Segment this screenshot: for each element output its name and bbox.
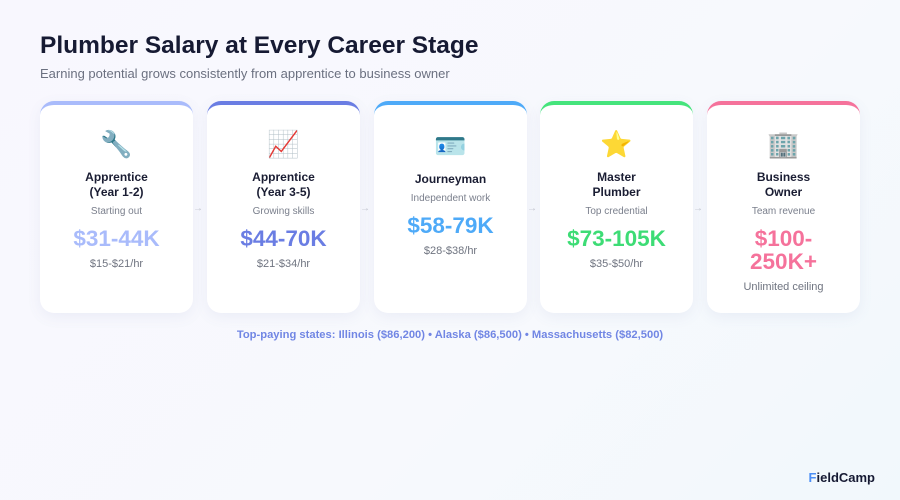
card title: Journeyman	[415, 172, 486, 186]
card: apprentice year 1-2: $31-44K	[73, 226, 160, 251]
card: business owner	[707, 101, 860, 313]
card: apprentice year 1-2: Starting out	[91, 206, 142, 217]
subtitle: Earning potential grows consistently from apprentice to business owner	[40, 66, 450, 81]
card: apprentice year 1-2	[40, 101, 193, 313]
card: apprentice year 3-5: Growing skills	[253, 206, 314, 217]
arrow: →	[527, 203, 537, 214]
card title: Plumber	[592, 185, 640, 199]
footer note: top-paying states: Top-paying states: Illinois ($86,200) • Alaska ($86,500) • Massachusetts ($82,500)	[237, 329, 663, 341]
arrow: →	[693, 203, 703, 214]
card title: Business	[757, 170, 810, 184]
card: business owner: 250K+	[750, 249, 817, 274]
card title: Owner	[765, 185, 802, 199]
card: business owner: Unlimited ceiling	[743, 281, 824, 293]
card title: (Year 1-2)	[89, 185, 144, 199]
card: journeyman: $58-79K	[407, 213, 494, 238]
card: business owner: $100-	[755, 226, 812, 251]
logo: FieldCamp	[809, 470, 875, 485]
card: master plumber: $73-105K	[567, 226, 666, 251]
icon: building: 🏢	[767, 130, 800, 160]
icon: chart: 📈	[267, 130, 300, 160]
card title	[592, 170, 640, 199]
card: journeyman: $28-$38/hr	[424, 245, 477, 257]
card title: Apprentice	[85, 170, 148, 184]
card: business owner: Team revenue	[752, 206, 815, 217]
card: master plumber	[540, 101, 693, 313]
card title: Master	[597, 170, 636, 184]
card: apprentice year 1-2: $15-$21/hr	[90, 258, 143, 270]
card title	[252, 170, 315, 199]
card: master plumber: $35-$50/hr	[590, 258, 643, 270]
card title	[757, 170, 810, 199]
title: Plumber Salary at Every Career Stage	[40, 32, 479, 59]
card: master plumber: Top credential	[585, 206, 648, 217]
card: journeyman: Independent work	[411, 193, 490, 204]
card: apprentice year 3-5: $44-70K	[240, 226, 327, 251]
card title: Apprentice	[252, 170, 315, 184]
arrow: →	[360, 203, 370, 214]
icon: star: ⭐	[600, 130, 633, 160]
arrow: →	[193, 203, 203, 214]
card title	[85, 170, 148, 199]
card: journeyman	[374, 101, 527, 313]
card title: (Year 3-5)	[256, 185, 311, 199]
card: apprentice year 3-5: $21-$34/hr	[257, 258, 310, 270]
icon: wrench: 🔧	[100, 130, 133, 160]
card: apprentice year 3-5	[207, 101, 360, 313]
icon: id card: 🪪	[434, 132, 467, 162]
